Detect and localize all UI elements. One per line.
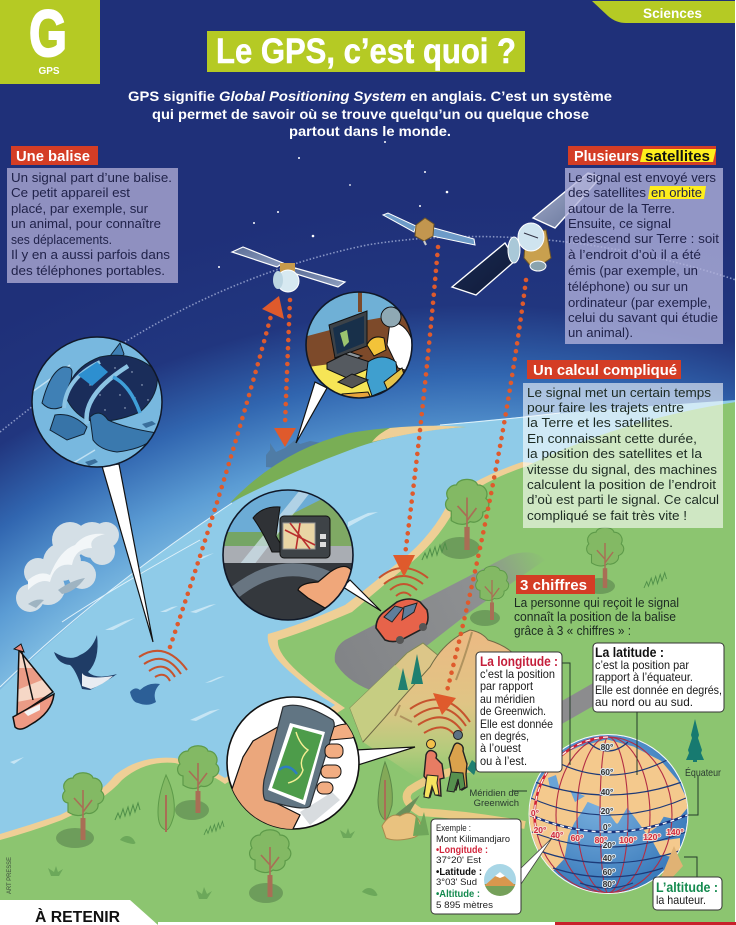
signal arcs: car <box>379 568 428 596</box>
footer: A retenir tab <box>0 900 158 925</box>
whale tail <box>54 635 117 690</box>
panel: Un calcul compliqué: compliqué se fait très vite ! <box>527 508 687 523</box>
callout: La longitude: au méridien <box>480 692 535 706</box>
panel: Une balise: Ce petit appareil est <box>11 185 130 200</box>
pointer: car inset <box>343 580 381 611</box>
panel: Un calcul compliqué: Le signal met un certain temps <box>527 385 712 400</box>
inset circle outline: computer <box>306 292 412 398</box>
inset circle: turtle with beacon <box>30 335 165 470</box>
callout: Mont Kilimandjaro example: Exemple : <box>436 823 471 834</box>
signal path: dotted line to hikers <box>433 280 526 715</box>
globe: 40° <box>603 853 616 863</box>
sailboat <box>13 644 54 729</box>
callout: La longitude: Elle est donnée <box>480 717 553 731</box>
stars <box>218 141 448 268</box>
callout: Mont Kilimandjaro example: •Altitude : <box>436 889 480 900</box>
panel: 3 chiffres: 3 chiffres <box>520 577 587 594</box>
callout: La longitude <box>476 652 562 772</box>
callout: Mont Kilimandjaro example: 5 895 mètres <box>436 900 493 911</box>
horizon lines <box>0 413 736 687</box>
signal path: dotted line down to base <box>274 300 296 447</box>
footpath and bushes <box>382 760 525 840</box>
panel: Plusieurs satellites: Ensuite, ce signal <box>568 216 671 231</box>
label: Méridien de Greenwich <box>469 788 519 809</box>
fir tree <box>686 719 704 762</box>
car <box>376 599 428 644</box>
callout: L'altitude <box>653 877 722 910</box>
callout: Mont Kilimandjaro example: 3°03' Sud <box>436 877 477 888</box>
panel: 3 chiffres <box>514 575 679 638</box>
panel: Un calcul compliqué: pour faire les trajets entre <box>527 400 684 415</box>
panel: Une balise: ses déplacements. <box>11 232 112 247</box>
panel: Un calcul compliqué <box>523 360 723 528</box>
callout: L'altitude: L’altitude : <box>656 879 718 895</box>
introduction: partout dans le monde. <box>289 123 451 139</box>
satellite orbit <box>0 237 736 432</box>
globe: 0° <box>603 822 612 832</box>
signal path: dotted line to car <box>393 247 438 577</box>
globe: 40° <box>551 830 564 840</box>
callout: La longitude: ou à l’est. <box>480 754 527 768</box>
land <box>0 402 736 925</box>
panel: 3 chiffres: connaît la position de la balise <box>514 609 676 624</box>
panel: 3 chiffres: La personne qui reçoit le signal <box>514 595 679 610</box>
panel: Plusieurs satellites: en orbite <box>651 185 702 200</box>
globe: 40° <box>601 787 614 797</box>
callout: La latitude: rapport à l’équateur. <box>595 670 693 684</box>
globe: 60° <box>603 867 616 877</box>
pointer: handheld inset <box>355 747 415 765</box>
panel: Une balise: Un signal part d’une balise. <box>11 170 172 185</box>
panel: Plusieurs satellites: téléphone) ou sur un <box>568 279 688 294</box>
callout: Mont Kilimandjaro example: Mont Kilimandjaro <box>436 834 510 845</box>
cloud <box>16 522 119 612</box>
sea <box>0 400 736 925</box>
panel: Un calcul compliqué: calculent la position de l’endroit <box>527 477 716 492</box>
panel: Une balise: des téléphones portables. <box>11 263 165 278</box>
globe: 80° <box>603 879 616 889</box>
panel: Plusieurs satellites <box>565 146 723 344</box>
callout: La latitude <box>593 643 724 712</box>
sea turtle <box>130 684 160 705</box>
callout: L'altitude: la hauteur. <box>656 893 706 907</box>
panel: Une balise: Il y en a aussi parfois dans <box>11 247 171 262</box>
callout: Mont Kilimandjaro example <box>431 819 521 914</box>
pointer: turtle inset <box>102 464 153 642</box>
coast sand <box>0 462 736 925</box>
callout: Mont Kilimandjaro example: 37°20' Est <box>436 855 481 866</box>
panel: Plusieurs satellites: celui du savant qui étudie <box>568 310 718 325</box>
globe: 60° <box>601 767 614 777</box>
label: Méridien de Greenwich: Méridien de <box>469 788 519 799</box>
corner tab: letter G: GPS <box>38 66 60 77</box>
callout: La longitude: c’est la position <box>480 667 555 681</box>
callout: La latitude: Elle est donnée en degrés, <box>595 683 722 697</box>
introduction: GPS signifie Global Positioning System en anglais. C’est un système <box>128 88 612 104</box>
panel: Plusieurs satellites: Plusieurs <box>574 148 639 165</box>
panel: Plusieurs satellites: satellites <box>645 148 710 165</box>
introduction <box>128 88 612 139</box>
panel: Un calcul compliqué: vitesse du signal, des machines <box>527 462 718 477</box>
globe: 20° <box>603 840 616 850</box>
panel: Un calcul compliqué: Un calcul compliqué <box>533 362 677 379</box>
globe: 80° <box>595 835 608 845</box>
globe: 100° <box>619 835 637 845</box>
callout: La longitude: de Greenwich. <box>480 704 546 718</box>
globe: 20° <box>534 825 547 835</box>
globe: 0° <box>531 808 540 818</box>
globe: 60° <box>571 833 584 843</box>
tab: Sciences: Sciences <box>643 5 702 21</box>
pointer: Kilimanjaro on globe <box>519 838 552 884</box>
globe: 140° <box>666 827 684 837</box>
hikers <box>424 730 467 798</box>
inset circle: scientists at computer <box>306 292 412 398</box>
panel: Un calcul compliqué: En connaissant cette durée, <box>527 431 697 446</box>
inset circle outline: turtle <box>32 337 162 467</box>
callout: La longitude: à l’ouest <box>480 741 522 755</box>
globe: 80° <box>601 742 614 752</box>
satellite 1 <box>232 247 345 292</box>
signal arcs: hikers <box>410 700 470 737</box>
panel: Une balise: placé, par exemple, sur <box>11 201 149 216</box>
panel: Une balise: Une balise <box>16 148 90 165</box>
footer strip <box>158 0 736 925</box>
globe <box>528 734 688 894</box>
globe: 20° <box>601 806 614 816</box>
inset circle: handheld GPS <box>227 697 359 829</box>
inset circle: car GPS device <box>220 488 356 623</box>
panel: Plusieurs satellites: Le signal est envoyé vers <box>568 170 716 185</box>
panel: Plusieurs satellites: des satellites <box>568 185 647 200</box>
signal path: dotted line up to satellite 1 <box>170 296 284 647</box>
label: Méridien de Greenwich: Greenwich <box>474 798 519 809</box>
panel: Plusieurs satellites: à l’endroit d’où il a été <box>568 247 701 262</box>
introduction: qui permet de savoir où se trouve quelqu’un ou quelque chose <box>152 106 589 122</box>
satellite 3 <box>452 173 601 295</box>
mountains <box>350 630 540 780</box>
panel: 3 chiffres: grâce à 3 « chiffres » : <box>514 623 631 638</box>
panel: Plusieurs satellites: redescend sur Terre : soit <box>568 231 719 246</box>
credit: ART PRESSE: ART PRESSE <box>6 856 13 894</box>
panel: Plusieurs satellites: émis (par exemple, un <box>568 263 698 278</box>
inset circle outline: car GPS <box>223 490 353 620</box>
callout: La latitude: au nord ou au sud. <box>595 695 693 709</box>
callout: La longitude: en degrés, <box>480 729 529 743</box>
globe: 120° <box>643 832 661 842</box>
callout: La longitude: La longitude : <box>480 653 558 669</box>
panel: Un calcul compliqué: d’où est parti le signal. Ce calcul <box>527 492 719 507</box>
satellite 2 <box>383 213 475 245</box>
callout: La latitude: c’est la position par <box>595 658 689 672</box>
icon: mountain thumbnail <box>484 864 516 896</box>
callout: Mont Kilimandjaro example: •Latitude : <box>436 867 482 878</box>
panel: Plusieurs satellites: autour de la Terre. <box>568 201 675 216</box>
distant shore with city <box>230 426 466 503</box>
callout: La latitude: La latitude : <box>595 644 664 660</box>
pointer: computer inset <box>296 382 327 443</box>
callout: Mont Kilimandjaro example: •Longitude : <box>436 845 488 856</box>
panel: Plusieurs satellites: un animal). <box>568 325 633 340</box>
leader lines <box>513 663 698 877</box>
panel: Une balise: un animal, pour connaître <box>11 216 161 231</box>
roads <box>335 552 595 725</box>
panel: Plusieurs satellites: ordinateur (par exemple, <box>568 295 711 310</box>
corner tab: letter G <box>0 0 100 84</box>
tab: Sciences <box>592 1 736 23</box>
sea waves <box>10 512 378 764</box>
trees <box>48 479 666 903</box>
callout: La longitude: par rapport <box>480 679 534 693</box>
signal arcs: turtle <box>139 651 187 681</box>
title: Le GPS, c’est quoi ? <box>216 32 516 71</box>
label: Équateur: Équateur <box>685 766 721 779</box>
panel: Une balise <box>7 146 178 283</box>
panel: Un calcul compliqué: la position des satellites et la <box>527 446 703 461</box>
panel: Un calcul compliqué: la Terre et les satellites. <box>527 415 673 430</box>
